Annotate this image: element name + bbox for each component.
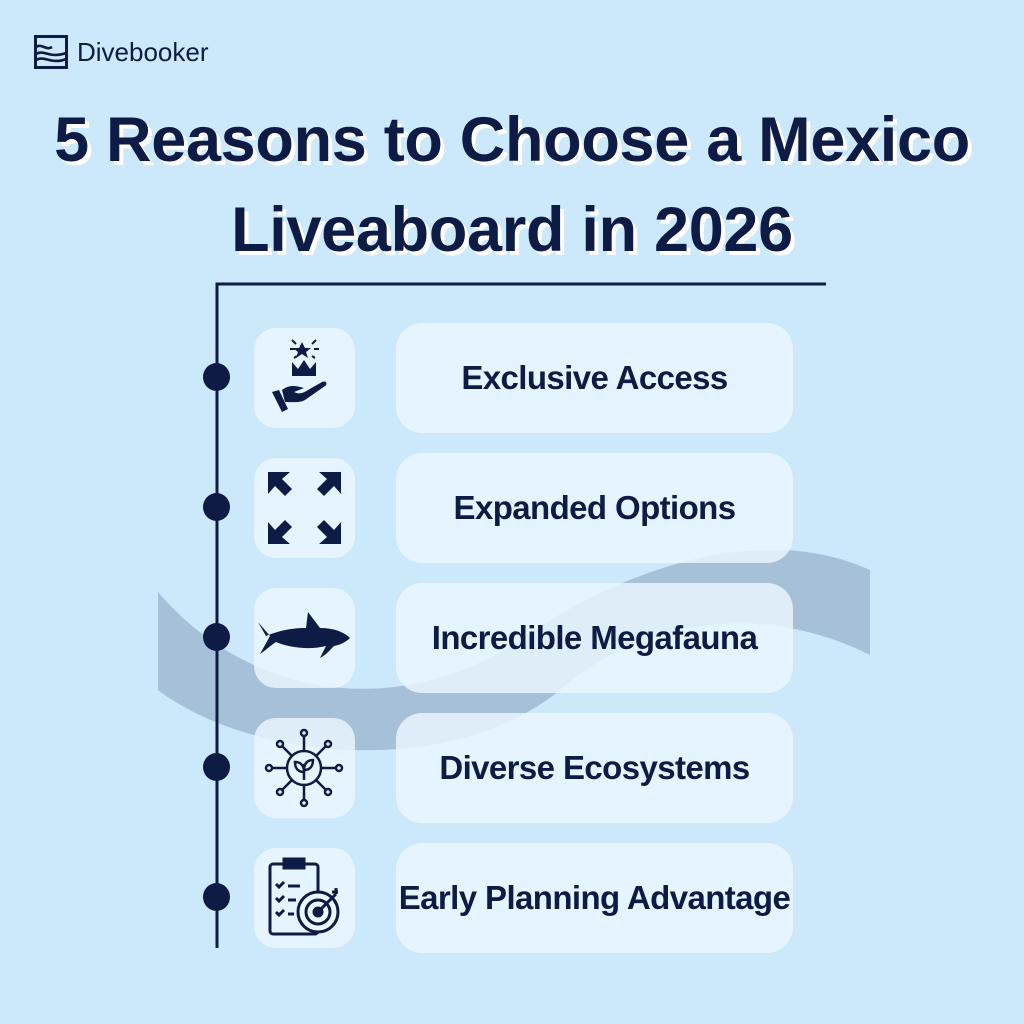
title: Liveaboard in 2026 xyxy=(231,195,793,265)
title: 5 Reasons to Choose a Mexico xyxy=(54,105,970,175)
item 2 xyxy=(203,453,793,563)
item 4: Diverse Ecosystems xyxy=(439,749,750,786)
item 3 xyxy=(203,583,793,693)
item 5 xyxy=(203,843,793,953)
item 1 xyxy=(203,323,793,433)
logo xyxy=(34,35,209,69)
item 3: Incredible Megafauna xyxy=(432,619,757,656)
item 2: Expanded Options xyxy=(454,489,735,526)
title xyxy=(54,105,972,265)
item 4 xyxy=(203,713,793,823)
logo: Divebooker xyxy=(77,37,209,67)
item 5: Early Planning Advantage xyxy=(399,879,790,916)
item 1: Exclusive Access xyxy=(461,359,728,396)
